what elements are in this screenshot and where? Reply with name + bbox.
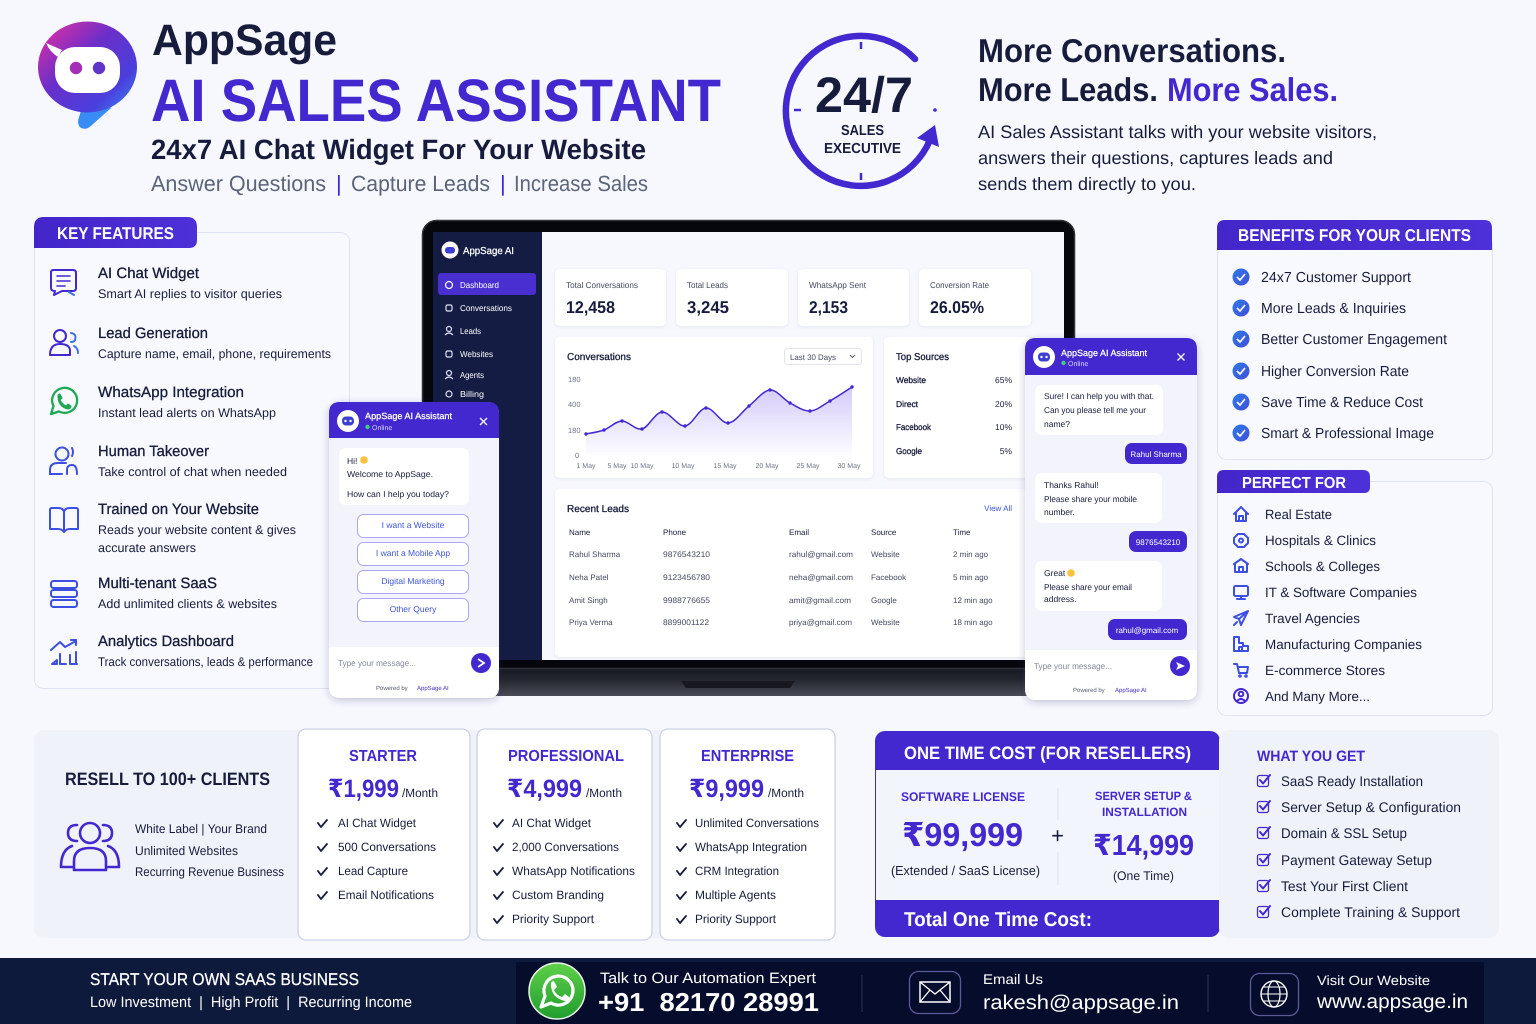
heading: key features (34, 217, 197, 248)
bot bubble: ask mobile (1035, 473, 1162, 523)
website contact (1316, 973, 1468, 1013)
stat card: total leads (676, 269, 788, 326)
server setup price: ₹14,999 (1093, 830, 1194, 862)
website contact: Visit Our Website (1317, 973, 1430, 988)
stat card: total conversations (555, 269, 666, 326)
resell benefits: Unlimited Websites (135, 844, 238, 858)
brand name: AppSage (152, 16, 337, 65)
stat card: total leads: Total Leads (687, 280, 728, 290)
heading: benefits (1217, 220, 1492, 250)
icon: lead generation (50, 330, 78, 355)
email contact: Email Us (983, 971, 1043, 987)
chat input area: Powered by (376, 685, 408, 692)
icon: human takeover (50, 448, 77, 474)
panel: top sources: 65% (995, 375, 1012, 385)
pricing card: enterprise: /Month (768, 786, 804, 800)
menu items: Billing (460, 389, 484, 399)
menu items: Conversations (460, 303, 512, 313)
server setup price: (One Time) (1113, 869, 1174, 883)
stat card: conversion rate: 26.05% (930, 298, 984, 317)
line chart: conversations: 180 (568, 426, 581, 435)
user bubble: name (1125, 443, 1187, 464)
pricing card: professional: 2,000 Conversations (512, 840, 619, 854)
chat input area (329, 647, 499, 698)
table: recent leads: 9988776655 (663, 596, 711, 605)
panel: top sources: Website (896, 375, 926, 385)
pricing card: enterprise: ₹9,999 (689, 775, 764, 803)
bot bubble: ask email (1035, 561, 1162, 611)
chat header (329, 402, 499, 438)
line chart: conversations: 15 May (714, 463, 737, 470)
tagline: | (336, 171, 342, 196)
line chart: conversations: 180 (568, 375, 581, 384)
panel: benefits for your clients (1217, 220, 1492, 460)
pricing card: professional: WhatsApp Notifications (512, 864, 635, 878)
stat card: total leads: 3,245 (687, 298, 729, 317)
headline: more conversations (978, 32, 1338, 108)
table: recent leads: 12 min ago (953, 596, 993, 605)
pricing card: enterprise: ENTERPRISE (701, 748, 794, 765)
bot bubble: ask email: address. (1044, 594, 1077, 604)
panel: what you get (1219, 730, 1499, 938)
pricing card: professional: AI Chat Widget (512, 816, 592, 830)
software license price: (Extended / SaaS License) (891, 863, 1040, 878)
pricing card: professional: Custom Branding (512, 888, 604, 902)
pricing card: enterprise: WhatsApp Integration (695, 840, 807, 854)
panel: top sources (884, 337, 1031, 478)
headline: more conversations: More Leads. (978, 71, 1158, 108)
feature: human takeover: Human Takeover (98, 443, 209, 460)
main title: AI SALES ASSISTANT (151, 67, 721, 134)
phone contact: Talk to Our Automation Expert (600, 970, 817, 987)
menu items: Leads (460, 326, 481, 336)
panel: key features (34, 217, 350, 688)
panel: top sources: 5% (1000, 446, 1012, 456)
heading: one time cost: ONE TIME COST (FOR RESELLERS) (904, 743, 1191, 763)
panel: top sources: Direct (896, 399, 919, 409)
bot bubble: ask name: Can you please tell me your (1044, 405, 1146, 415)
email contact (983, 971, 1179, 1014)
pricing card: starter: ₹1,999 (328, 775, 399, 803)
software license price: SOFTWARE LICENSE (901, 790, 1025, 804)
feature: human takeover (98, 443, 287, 479)
footer call to action: START YOUR OWN SAAS BUSINESS (90, 970, 359, 989)
icon: factory (1234, 637, 1248, 651)
panel: top sources: Google (896, 446, 922, 456)
stat card: whatsapp sent (798, 269, 909, 326)
chat header: AppSage AI Assistant (365, 411, 453, 421)
menu items: Websites (460, 349, 493, 359)
table: recent leads: Website (871, 618, 900, 627)
tagline (151, 171, 648, 196)
checklist: SaaS Ready Installation (1281, 773, 1423, 789)
feature: trained on your website (98, 501, 296, 555)
chat input area: AppSage AI (1115, 687, 1147, 694)
table: recent leads: 18 min ago (953, 618, 993, 627)
description paragraph: sends them directly to you. (978, 174, 1196, 194)
bot bubble: ask email: Great (1044, 568, 1066, 578)
pricing card: professional: ₹4,999 (507, 775, 582, 803)
label: and many more: And Many More... (1265, 689, 1370, 704)
table: recent leads: Google (871, 596, 897, 605)
table: recent leads: Rahul Sharma (569, 550, 621, 559)
table: recent leads: Source (871, 528, 897, 537)
feature: multi-tenant saas: Add unlimited clients & websites (98, 597, 277, 611)
menu items (445, 303, 512, 399)
line chart: conversations: 20 May (756, 463, 779, 470)
footer bar (0, 958, 1536, 1024)
benefit list: More Leads & Inquiries (1261, 301, 1406, 317)
panel: perfect for (1217, 470, 1492, 716)
table: recent leads: Amit Singh (569, 596, 608, 605)
bot message bubble: How can I help you today? (347, 489, 449, 499)
table: recent leads: Facebook (871, 573, 907, 582)
icon: cart (1234, 664, 1248, 677)
bot message bubble: Hi! (347, 456, 357, 466)
plus sign (1051, 788, 1064, 885)
icon: user group (61, 823, 119, 870)
laptop dashboard mockup (405, 220, 1095, 696)
pricing card: enterprise: Multiple Agents (695, 888, 776, 902)
icon: book (50, 508, 78, 532)
benefit list: Save Time & Reduce Cost (1261, 395, 1423, 411)
feature: whatsapp integration: WhatsApp Integration (98, 384, 244, 401)
table: recent leads: 9876543210 (663, 550, 711, 559)
server setup price: INSTALLATION (1102, 805, 1187, 819)
bot message bubble: Welcome to AppSage. (347, 469, 433, 479)
benefit list: Smart & Professional Image (1261, 426, 1434, 442)
feature: whatsapp integration: Instant lead alerts on WhatsApp (98, 406, 276, 420)
sidebar (433, 232, 542, 660)
benefit list: Higher Conversion Rate (1261, 364, 1409, 380)
user bubble: phone: 9876543210 (1136, 538, 1181, 547)
chat input area: Type your message... (338, 658, 416, 668)
pricing card: starter: /Month (402, 786, 438, 800)
feature: multi-tenant saas (98, 575, 277, 611)
tagline: Answer Questions (151, 171, 326, 196)
feature: trained on your website: Trained on Your Website (98, 501, 259, 518)
table: recent leads: Priya Verma (569, 618, 613, 627)
laptop bezel (422, 220, 1074, 668)
bot bubble: ask mobile: number. (1044, 507, 1075, 517)
pricing card: enterprise: CRM Integration (695, 864, 779, 878)
checklist: Complete Training & Support (1281, 904, 1460, 920)
icon: real estate (1234, 507, 1248, 521)
active menu: dashboard (438, 273, 536, 295)
line chart: conversations: 10 May (672, 463, 695, 470)
table: recent leads: Website (871, 550, 900, 559)
table: recent leads: 5 min ago (953, 573, 989, 582)
label: travel agencies: Travel Agencies (1265, 611, 1360, 626)
heading: benefits: BENEFITS FOR YOUR CLIENTS (1238, 226, 1471, 245)
line chart: conversations: Last 30 Days (790, 353, 836, 362)
pricing card: starter: 500 Conversations (338, 840, 436, 854)
pricing card: starter: Lead Capture (338, 864, 408, 878)
quick reply buttons: I want a Website (382, 520, 445, 530)
bot bubble: ask name: Sure! I can help you with that. (1044, 391, 1154, 401)
benefit list: 24x7 Customer Support (1261, 270, 1411, 286)
label: schools: Schools & Colleges (1265, 559, 1380, 574)
software license price (891, 790, 1040, 878)
checklist: Payment Gateway Setup (1281, 852, 1432, 868)
screen background (433, 232, 1064, 660)
plus sign: + (1051, 823, 1064, 848)
line chart: conversations: 25 May (797, 463, 820, 470)
stat card: whatsapp sent: WhatsApp Sent (809, 280, 867, 290)
table: recent leads: Email (789, 528, 809, 537)
label: real estate: Real Estate (1265, 507, 1332, 522)
table: recent leads: Neha Patel (569, 573, 609, 582)
footer call to action: Low Investment | High Profit | Recurring Income (90, 994, 412, 1011)
table: recent leads: 8899001122 (663, 618, 710, 627)
server setup price: SERVER SETUP & (1095, 789, 1192, 803)
table: recent leads: Recent Leads (567, 504, 629, 515)
panel: top sources: Top Sources (896, 352, 949, 363)
user bubble: phone (1129, 531, 1187, 552)
icon: plane (1234, 611, 1248, 625)
bot bubble: ask name (1035, 385, 1163, 435)
table: recent leads: amit@gmail.com (789, 596, 851, 605)
stat card: total conversations: 12,458 (566, 298, 615, 317)
footer call to action (90, 970, 412, 1011)
pricing card: starter (298, 729, 470, 940)
icon: chat widget (51, 270, 76, 295)
feature: AI chat widget: Smart AI replies to visitor queries (98, 287, 282, 301)
label: manufacturing: Manufacturing Companies (1265, 637, 1422, 652)
icon: analytics chart (51, 640, 77, 664)
feature: analytics dashboard (98, 633, 313, 669)
description paragraph (978, 122, 1377, 194)
bot bubble: ask mobile: Please share your mobile (1044, 494, 1137, 504)
chat input area: Type your message... (1034, 661, 1112, 671)
logo: AppSage chat bubble (38, 22, 137, 128)
panel: top sources: 10% (995, 422, 1012, 432)
chat widget: lead capture conversation (1025, 338, 1197, 700)
icon: server stack (51, 581, 77, 607)
stat card: whatsapp sent: 2,153 (809, 298, 848, 317)
line chart: conversations: 10 May (631, 463, 654, 470)
icon: whatsapp phone (529, 963, 585, 1019)
icon: whatsapp (51, 388, 77, 414)
resell benefits: Recurring Revenue Business (135, 865, 284, 879)
chat header: Online (1068, 360, 1088, 368)
feature: trained on your website: accurate answers (98, 541, 196, 555)
active menu: dashboard: Dashboard (460, 280, 499, 290)
checklist: Server Setup & Configuration (1281, 799, 1461, 815)
table: recent leads: priya@gmail.com (789, 618, 852, 627)
table: recent leads: Name (569, 528, 591, 537)
tagline: Capture Leads (351, 171, 490, 196)
badge: 24/7 sales executive clock: 24/7 (815, 67, 913, 123)
bot bubble: ask mobile: Thanks Rahul! (1044, 480, 1099, 490)
checklist (1258, 773, 1461, 920)
bot message bubble (339, 448, 469, 505)
server setup price (1093, 789, 1194, 883)
feature: trained on your website: Reads your website content & gives (98, 523, 296, 537)
feature: analytics dashboard: Analytics Dashboard (98, 633, 234, 650)
subtitle: 24x7 AI Chat Widget For Your Website (151, 134, 646, 165)
pricing card: professional: /Month (586, 786, 622, 800)
description paragraph: answers their questions, captures leads and (978, 148, 1333, 168)
heading: perfect for (1217, 470, 1370, 493)
table: recent leads (555, 489, 1031, 657)
menu items: Agents (460, 370, 484, 380)
table: recent leads: rahul@gmail.com (789, 550, 853, 559)
feature: AI chat widget: AI Chat Widget (98, 265, 200, 282)
pricing card: professional: PROFESSIONAL (508, 748, 624, 765)
tagline: Increase Sales (514, 171, 648, 196)
quick reply buttons (358, 514, 468, 622)
chat input area: Powered by (1073, 687, 1105, 694)
table: recent leads: Phone (663, 528, 687, 537)
website contact: www.appsage.in (1316, 991, 1468, 1013)
table: recent leads: neha@gmail.com (789, 573, 853, 582)
heading: what you get: WHAT YOU GET (1257, 748, 1365, 765)
chat input area: AppSage AI (417, 685, 449, 692)
panel: top sources: 20% (995, 399, 1012, 409)
line chart: conversations: 30 May (838, 463, 861, 470)
table: recent leads: Time (953, 528, 971, 537)
badge: 24/7 sales executive clock: SALES (841, 123, 884, 139)
panel: resell to 100+ clients (34, 730, 836, 938)
sidebar logo (442, 242, 514, 258)
line chart: conversations (555, 337, 873, 478)
pricing card: professional (477, 729, 652, 940)
icon: schools (1234, 559, 1248, 572)
pricing card: starter: Email Notifications (338, 888, 434, 902)
benefit list: Better Customer Engagement (1261, 332, 1447, 348)
line chart: conversations: 400 (568, 400, 581, 409)
table: recent leads: View All (984, 504, 1012, 513)
label: hospitals: Hospitals & Clinics (1265, 533, 1376, 548)
headline: more conversations: More Sales. (1167, 71, 1338, 108)
heading: perfect for: PERFECT FOR (1242, 475, 1346, 492)
heading: resell: RESELL TO 100+ CLIENTS (65, 769, 270, 789)
table: recent leads: 9123456780 (663, 573, 711, 582)
line chart: conversations: 1 May (576, 463, 596, 470)
quick reply buttons: Digital Marketing (381, 576, 445, 586)
label: e-commerce: E-commerce Stores (1265, 663, 1385, 678)
headline: more conversations: More Conversations. (978, 32, 1286, 69)
total one time cost: Total One Time Cost: (904, 909, 1092, 931)
feature: analytics dashboard: Track conversations, leads & performance (98, 655, 313, 669)
quick reply buttons: I want a Mobile App (376, 548, 450, 558)
email contact: rakesh@appsage.in (983, 992, 1179, 1014)
pricing card: enterprise: Priority Support (695, 912, 777, 926)
pricing card: enterprise: Unlimited Conversations (695, 816, 819, 830)
panel: top sources: Facebook (896, 422, 932, 432)
user bubble: email (1108, 619, 1187, 640)
feature: human takeover: Take control of chat when needed (98, 465, 287, 479)
icon: user circle (1234, 689, 1248, 703)
icon: IT monitor (1234, 586, 1248, 599)
chat input area (1025, 650, 1197, 700)
pricing card: starter: STARTER (349, 748, 417, 765)
checklist: Test Your First Client (1281, 878, 1408, 894)
feature: lead generation (98, 325, 331, 361)
stat card: total conversations: Total Conversations (566, 280, 638, 290)
software license price: ₹99,999 (902, 816, 1023, 853)
feature: lead generation: Lead Generation (98, 325, 208, 342)
badge: 24/7 sales executive clock: EXECUTIVE (824, 141, 901, 157)
stat card: conversion rate: Conversion Rate (930, 280, 989, 290)
phone contact: +91 82170 28991 (598, 987, 819, 1017)
badge: 24/7 sales executive clock (786, 36, 939, 186)
sidebar logo: AppSage AI (463, 246, 514, 257)
checklist: Domain & SSL Setup (1281, 825, 1407, 841)
stat card: conversion rate (919, 269, 1031, 326)
phone contact (598, 970, 819, 1017)
line chart: conversations: Conversations (567, 352, 631, 363)
heading: key features: KEY FEATURES (57, 224, 174, 243)
description paragraph: AI Sales Assistant talks with your website visitors, (978, 122, 1377, 142)
table: recent leads: 2 min ago (953, 550, 989, 559)
feature: AI chat widget (98, 265, 282, 301)
pricing card: professional: Priority Support (512, 912, 595, 926)
pricing card: enterprise (660, 729, 835, 940)
feature: lead generation: Capture name, email, phone, requirements (98, 347, 331, 361)
icon: globe (1250, 974, 1298, 1016)
bot bubble: ask email: Please share your email (1044, 582, 1132, 592)
benefit list (1232, 268, 1447, 442)
laptop base (405, 666, 1095, 696)
chat widget: welcome menu (329, 402, 499, 698)
resell benefits (135, 822, 284, 879)
tagline: | (500, 171, 506, 196)
chat header: Online (372, 424, 392, 432)
line chart: conversations: 0 (575, 451, 579, 460)
chat header: AppSage AI Assistant (1061, 348, 1147, 358)
resell benefits: White Label | Your Brand (135, 822, 267, 836)
icon: hospitals (1234, 534, 1248, 547)
pricing card: starter: AI Chat Widget (338, 816, 417, 830)
feature: whatsapp integration (98, 384, 276, 420)
line chart: conversations: 5 May (607, 463, 627, 470)
bot bubble: ask name: name? (1044, 419, 1070, 429)
quick reply buttons: Other Query (390, 604, 437, 614)
panel: one time cost (875, 731, 1220, 937)
icon: email envelope (910, 972, 960, 1014)
user bubble: email: rahul@gmail.com (1116, 626, 1179, 635)
chat header (1025, 338, 1197, 375)
feature: multi-tenant saas: Multi-tenant SaaS (98, 575, 217, 592)
label: IT companies: IT & Software Companies (1265, 585, 1417, 600)
user bubble: name: Rahul Sharma (1130, 450, 1182, 459)
